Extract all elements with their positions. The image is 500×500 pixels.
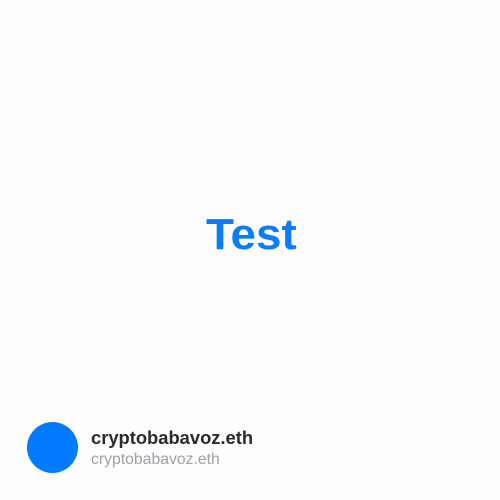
avatar circle — [27, 422, 78, 473]
profile block — [27, 422, 253, 473]
display name: cryptobabavoz.eth — [91, 428, 253, 448]
handle: cryptobabavoz.eth — [91, 451, 220, 468]
heading: Test: Test — [206, 210, 297, 259]
